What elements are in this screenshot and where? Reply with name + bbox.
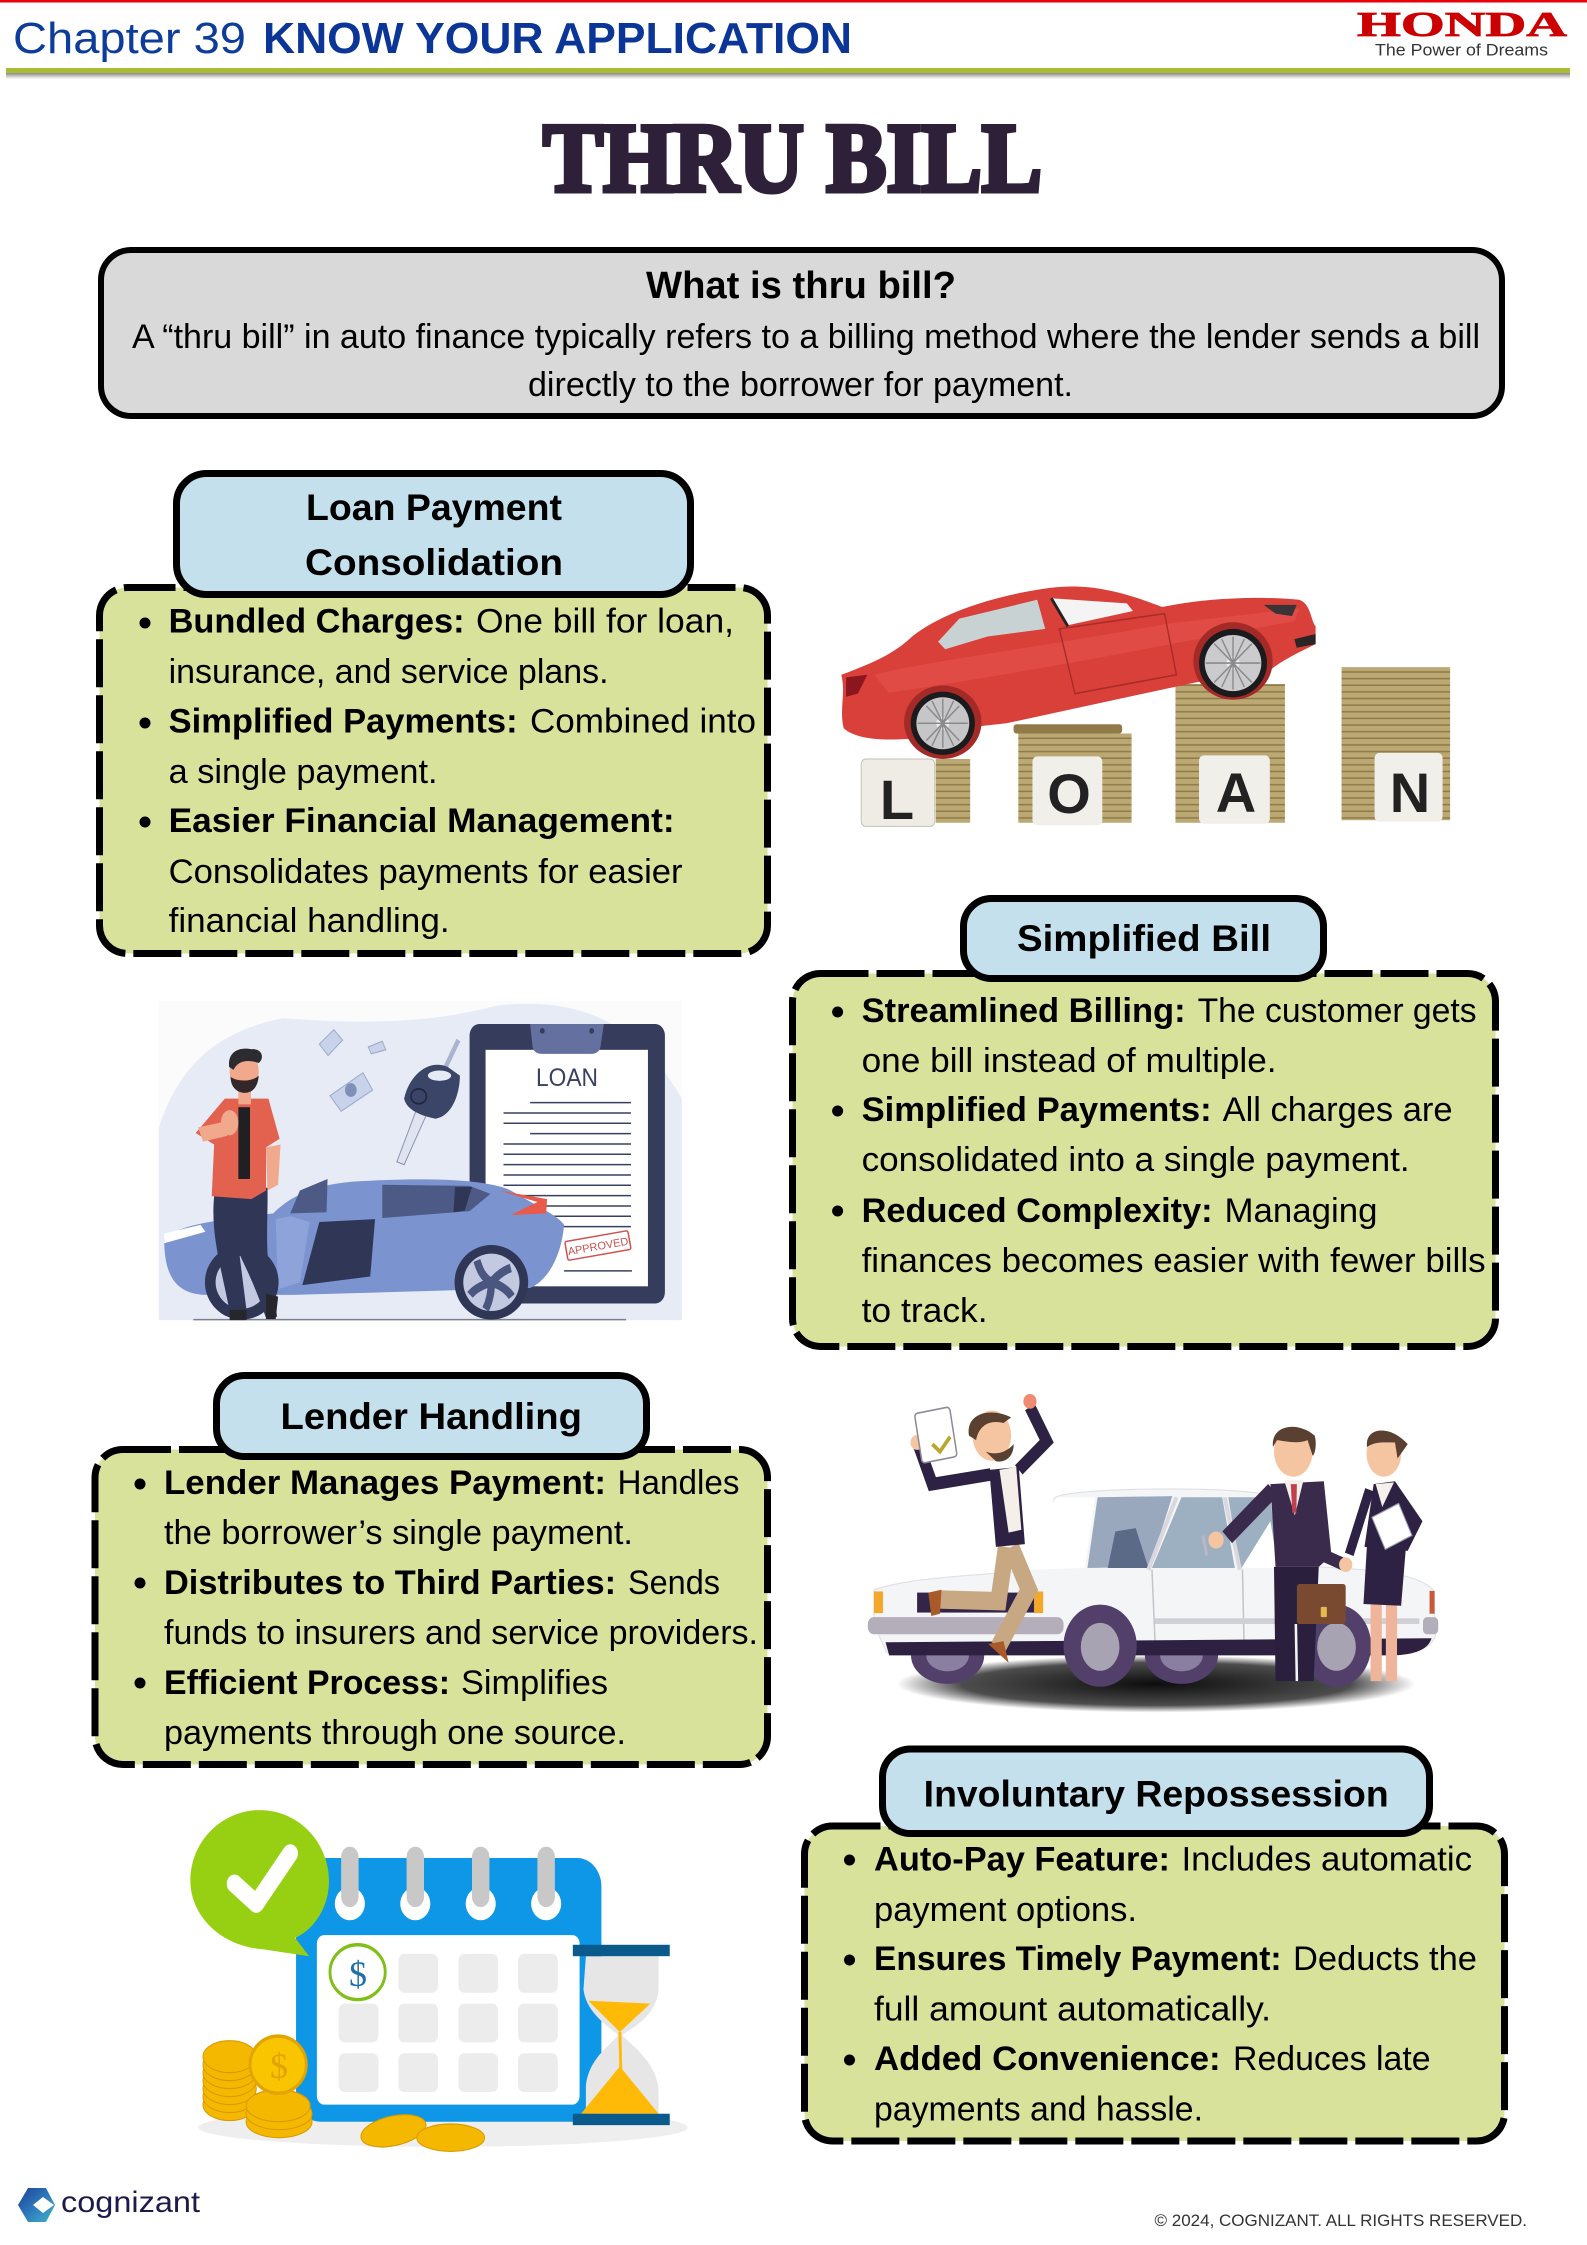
bullet list: Added Convenience: [874, 2040, 1221, 2078]
bullet list: Deducts the [1293, 1940, 1477, 1978]
panel heading: Loan Payment [306, 487, 562, 528]
dollar signs: $ [349, 1954, 367, 1994]
panel heading: Consolidation [305, 542, 563, 583]
honda logo: The Power of Dreams [1375, 42, 1548, 60]
chapter heading: KNOW YOUR APPLICATION [263, 14, 852, 63]
bullet list: Simplifies [461, 1664, 608, 1702]
cognizant logo [18, 2186, 201, 2222]
bullet list: a single payment. [169, 753, 438, 791]
header bar [0, 0, 1587, 79]
bullet list: Managing [1224, 1192, 1378, 1230]
panel: loan payment consolidation [100, 474, 768, 954]
bullet list: funds to insurers and service providers. [164, 1614, 758, 1652]
icon: cognizant hexagon [18, 2188, 55, 2222]
bullet list: One bill for loan, [476, 602, 734, 640]
panel: involuntary repossession [804, 1749, 1504, 2141]
panel heading [216, 1376, 646, 1456]
bullet list: Easier Financial Management: [169, 802, 675, 840]
bullet list: consolidated into a single payment. [862, 1141, 1410, 1179]
bullet list: Lender Manages Payment: [164, 1464, 606, 1502]
honda logo [1357, 5, 1568, 60]
bullet list: financial handling. [169, 902, 450, 940]
bullet list: All charges are [1223, 1091, 1453, 1129]
title: THRU BILL [543, 104, 1042, 213]
bullet list: Sends [628, 1564, 720, 1602]
definition text: directly to the borrower for payment. [528, 366, 1073, 404]
bullet list: Ensures Timely Payment: [874, 1940, 1282, 1978]
bullet list: Includes automatic [1182, 1840, 1472, 1878]
bullet list: to track. [862, 1292, 988, 1330]
bullet list: the borrower’s single payment. [164, 1514, 633, 1552]
bullet list: Reduced Complexity: [862, 1192, 1213, 1230]
bullet list: payments through one source. [164, 1714, 626, 1752]
bullet list: full amount automatically. [874, 1991, 1271, 2029]
bullet list: payments and hassle. [874, 2090, 1203, 2128]
honda logo: HONDA [1357, 5, 1568, 44]
bullet list: Reduces late [1233, 2040, 1431, 2078]
panel heading: Simplified Bill [1017, 918, 1271, 959]
chapter heading [13, 14, 852, 63]
bullet list: Simplified Payments: [862, 1091, 1212, 1129]
bullet list: Handles [618, 1464, 740, 1502]
bullet list [134, 1464, 758, 1752]
bullet list: insurance, and service plans. [169, 653, 609, 691]
panel heading [882, 1749, 1430, 1834]
bullet list: Distributes to Third Parties: [164, 1564, 616, 1602]
bullet list: Simplified Payments: [169, 702, 518, 740]
definition text: A “thru bill” in auto finance typically refers to a billing method where the lender sends a bill [132, 318, 1480, 356]
definition text [132, 318, 1480, 404]
panel: what is thru bill [101, 250, 1502, 416]
letter blocks [880, 761, 1430, 831]
bullet list: Consolidates payments for easier [169, 853, 683, 891]
bullet list: Combined into [530, 702, 756, 740]
illustration: payment calendar with coins and hourglass [190, 1810, 688, 2152]
bullet list: Streamlined Billing: [862, 992, 1186, 1030]
panel heading [964, 898, 1324, 978]
letter blocks: L [880, 768, 914, 831]
bullet list: one bill instead of multiple. [862, 1042, 1277, 1080]
panel: lender handling [95, 1376, 768, 1764]
bullet list: payment options. [874, 1891, 1137, 1929]
bullet list: finances becomes easier with fewer bills [862, 1242, 1486, 1280]
document label: LOAN [536, 1064, 598, 1092]
bullet list [844, 1840, 1477, 2128]
cognizant logo: cognizant [61, 2186, 201, 2219]
panel heading [176, 474, 690, 594]
bullet list: Efficient Process: [164, 1664, 450, 1702]
illustration: man with car and loan document [159, 1001, 682, 1320]
panel heading: Lender Handling [280, 1396, 582, 1437]
chapter heading: Chapter 39 [13, 14, 246, 63]
copyright: © 2024, COGNIZANT. ALL RIGHTS RESERVED. [1154, 2212, 1527, 2230]
letter blocks: O [1047, 762, 1091, 825]
bullet list: The customer gets [1198, 992, 1477, 1030]
bullet list: Bundled Charges: [169, 602, 465, 640]
bullet list [140, 602, 756, 940]
dollar signs [270, 1954, 367, 2086]
dollar signs: $ [270, 2046, 288, 2086]
panel heading: Involuntary Repossession [924, 1774, 1389, 1815]
panel heading: What is thru bill? [646, 265, 956, 307]
approved stamp: APPROVED [567, 1236, 629, 1258]
panel: simplified bill [792, 898, 1496, 1346]
bullet list [832, 992, 1486, 1330]
letter blocks: A [1216, 761, 1256, 824]
illustration: red car on loan coin stacks [841, 586, 1450, 831]
letter blocks: N [1390, 761, 1430, 824]
bullet list: Auto-Pay Feature: [874, 1840, 1170, 1878]
illustration: happy customer with white car [868, 1394, 1438, 1712]
